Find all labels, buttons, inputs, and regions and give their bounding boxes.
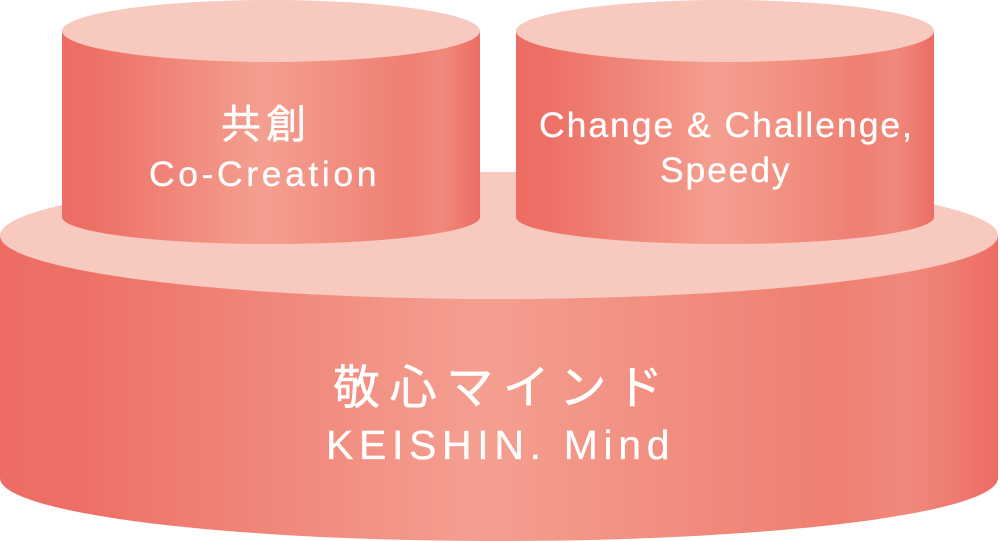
label: KEISHIN. Mind: KEISHIN. Mind [326, 422, 670, 468]
label: KEISHIN. Mind [326, 361, 670, 468]
label: KEISHIN. Mind: 敬心マインド [333, 361, 663, 414]
label: Co-Creation: Co-Creation [149, 154, 376, 194]
label: Change and Challenge, Speedy: Speedy [660, 150, 790, 190]
cylinder: Co-Creation [62, 0, 480, 244]
label: Co-Creation [149, 103, 376, 194]
cylinder: KEISHIN. Mind base [0, 172, 998, 541]
label: Co-Creation: 共創 [221, 103, 306, 147]
label: Change and Challenge, Speedy [539, 105, 912, 190]
cylinder: Change and Challenge, Speedy [516, 0, 934, 244]
label: Change and Challenge, Speedy: Change & Challenge, [539, 105, 912, 145]
